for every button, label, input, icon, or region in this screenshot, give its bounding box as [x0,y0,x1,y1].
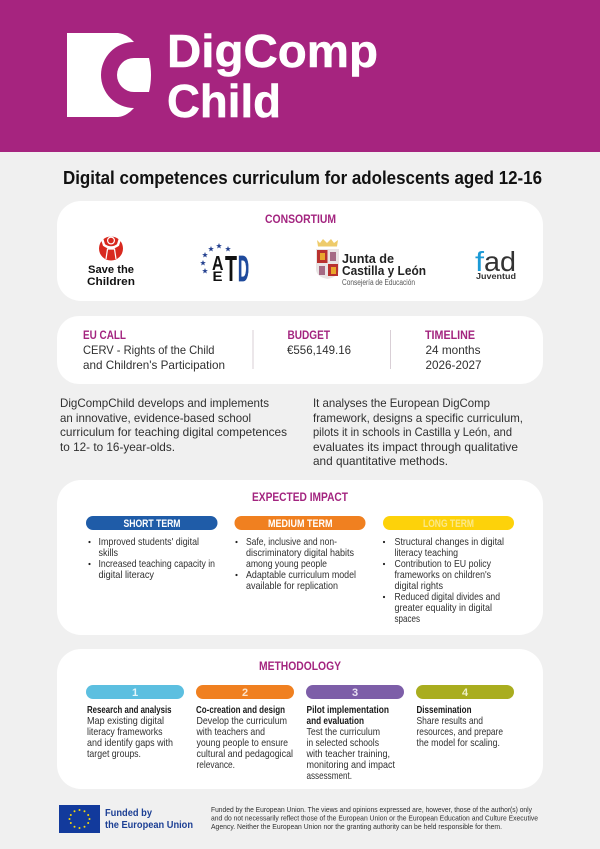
step 4: the model for scaling. [416,738,500,749]
fact: timeline: 2026-2027 [426,358,482,372]
text block: intro left: to 12- to 16-year-olds. [60,440,175,454]
step 3: monitoring and impact [306,760,395,771]
text block: intro right: and quantitative methods. [313,454,448,468]
column: medium term: available for replication [246,581,338,592]
step 3 [306,685,404,782]
column: medium term: among young people [246,559,327,570]
step 3: Pilot implementation [306,705,389,716]
text block: intro left: curriculum for teaching digital competences [60,425,287,439]
step 1: Map existing digital [87,716,164,727]
text block: intro left [60,396,287,454]
header banner [0,0,600,152]
step 4: 4 [462,687,469,699]
heading: methodology: METHODOLOGY [259,659,341,673]
column: medium term: MEDIUM TERM [268,518,332,530]
column: long term: greater equality in digital [394,603,492,614]
column: long term: digital rights [394,581,443,592]
step 3: in selected schools [306,738,379,749]
fact: EU call: CERV - Rights of the Child [83,343,214,357]
column: short term: Increased teaching capacity in [98,559,215,570]
step 3: assessment. [306,771,352,782]
icon: EU flag [59,805,100,833]
step 2: young people to ensure [196,738,288,749]
funded by label [105,808,193,831]
panel: consortium [57,201,543,301]
column: long term: spaces [394,614,420,625]
step 2: Develop the curriculum [196,716,287,727]
step 1 [86,685,184,760]
step 1: Research and analysis [87,705,172,716]
fact: timeline: TIMELINE [425,328,475,342]
step 1: 1 [132,687,138,699]
step 2: 2 [242,687,248,699]
text block: intro right: pilots it in schools in Castilla y León, and [313,425,512,439]
logo wordmark: DigComp [167,25,378,77]
column: long term: Structural changes in digital [394,537,504,548]
column: medium term [234,516,366,592]
panel: project facts [57,316,543,384]
fact: EU call [83,328,225,372]
step 2: cultural and pedagogical [196,749,293,760]
text block: intro left: DigCompChild develops and implements [60,396,269,410]
step 4: Dissemination [416,705,472,716]
fact: budget: BUDGET [288,328,331,342]
panel: expected impact [57,480,543,635]
column: long term: literacy teaching [394,548,458,559]
column: short term: Improved students' digital [98,537,199,548]
column: long term: Contribution to EU policy [394,559,492,570]
fact: EU call: and Children's Participation [83,358,225,372]
step 1: literacy frameworks [87,727,162,738]
fact: timeline: 24 months [426,343,480,357]
column: short term: skills [98,548,118,559]
heading: consortium: CONSORTIUM [265,212,336,226]
disclaimer [211,805,538,831]
column: medium term: discriminatory digital habits [246,548,354,559]
column: medium term: Adaptable curriculum model [246,570,356,581]
icon: DigComp Child logo mark [67,33,151,117]
title: Digital competences curriculum for adolescents aged 12-16 [63,167,542,188]
text block: intro left: an innovative, evidence-based school [60,411,251,425]
text block: intro right: It analyses the European DigComp [313,396,490,410]
logo: fad Juventud: Juventud [476,271,516,281]
column: long term: Reduced digital divides and [394,592,500,603]
logo: fad Juventud: ad [484,246,516,277]
logo: Junta de Castilla y Leon: Junta de [342,252,394,266]
logo: Save the Children [87,236,135,288]
step 2: with teachers and [196,727,265,738]
step 2: Co-creation and design [196,705,285,716]
heading: expected impact: EXPECTED IMPACT [252,490,349,504]
step 4 [416,685,514,749]
column: short term [86,516,218,581]
funded by label: the European Union [105,820,193,831]
logo wordmark [167,25,378,127]
logo: Junta de Castilla y Leon: Consejería de Educación [342,278,415,287]
panel: consortium: D [238,248,249,289]
fact: timeline [425,328,482,372]
column: short term: digital literacy [98,570,155,581]
column: short term: SHORT TERM [124,518,180,530]
step 2: relevance. [196,760,235,771]
fact: EU call: EU CALL [83,328,126,342]
fact: budget [287,328,351,357]
step 3: 3 [352,687,358,699]
panel: methodology [57,649,543,789]
fact: budget: €556,149.16 [287,343,351,357]
text block: intro right: evaluates its impact through qualitative [313,440,518,454]
step 2 [196,685,294,771]
disclaimer: Funded by the European Union. The views and opinions expressed are, however, those of the author(s) only [211,805,532,814]
column: medium term: Safe, inclusive and non- [246,537,337,548]
logo: ATD: A [212,253,224,275]
logo: Save the Children: Children [87,276,135,288]
step 3: with teacher training, [306,749,390,760]
text block: intro right: framework, designs a specific curriculum, [313,411,523,425]
logo: Junta de Castilla y Leon: Castilla y León [342,264,426,278]
disclaimer: and do not necessarily reflect those of the European Union or the European Education and Culture Executive [211,814,538,822]
logo: fad Juventud: f [475,246,484,277]
column: long term: frameworks on children's [394,570,491,581]
logo: ATD: E [212,268,222,284]
text block: intro right [313,396,523,468]
step 1: and identify gaps with [87,738,173,749]
step 4: Share results and [416,716,483,727]
column: long term [383,516,514,625]
logo: fad Juventud [475,246,516,281]
logo: ATD: T [225,248,237,289]
logo: Save the Children: Save the [88,264,134,276]
funded by label: Funded by [105,808,152,819]
footer: EU funding [59,805,538,833]
logo wordmark: Child [167,75,281,127]
step 3: Test the curriculum [306,727,380,738]
step 3: and evaluation [306,716,364,727]
logo: ATD [200,243,249,289]
logo: Junta de Castilla y Leon [316,239,426,287]
column: long term: LONG TERM [423,518,474,530]
step 4: resources, and prepare [416,727,503,738]
disclaimer: Agency. Neither the European Union nor the granting authority can be held responsible for them. [211,822,502,831]
step 1: target groups. [87,749,141,760]
